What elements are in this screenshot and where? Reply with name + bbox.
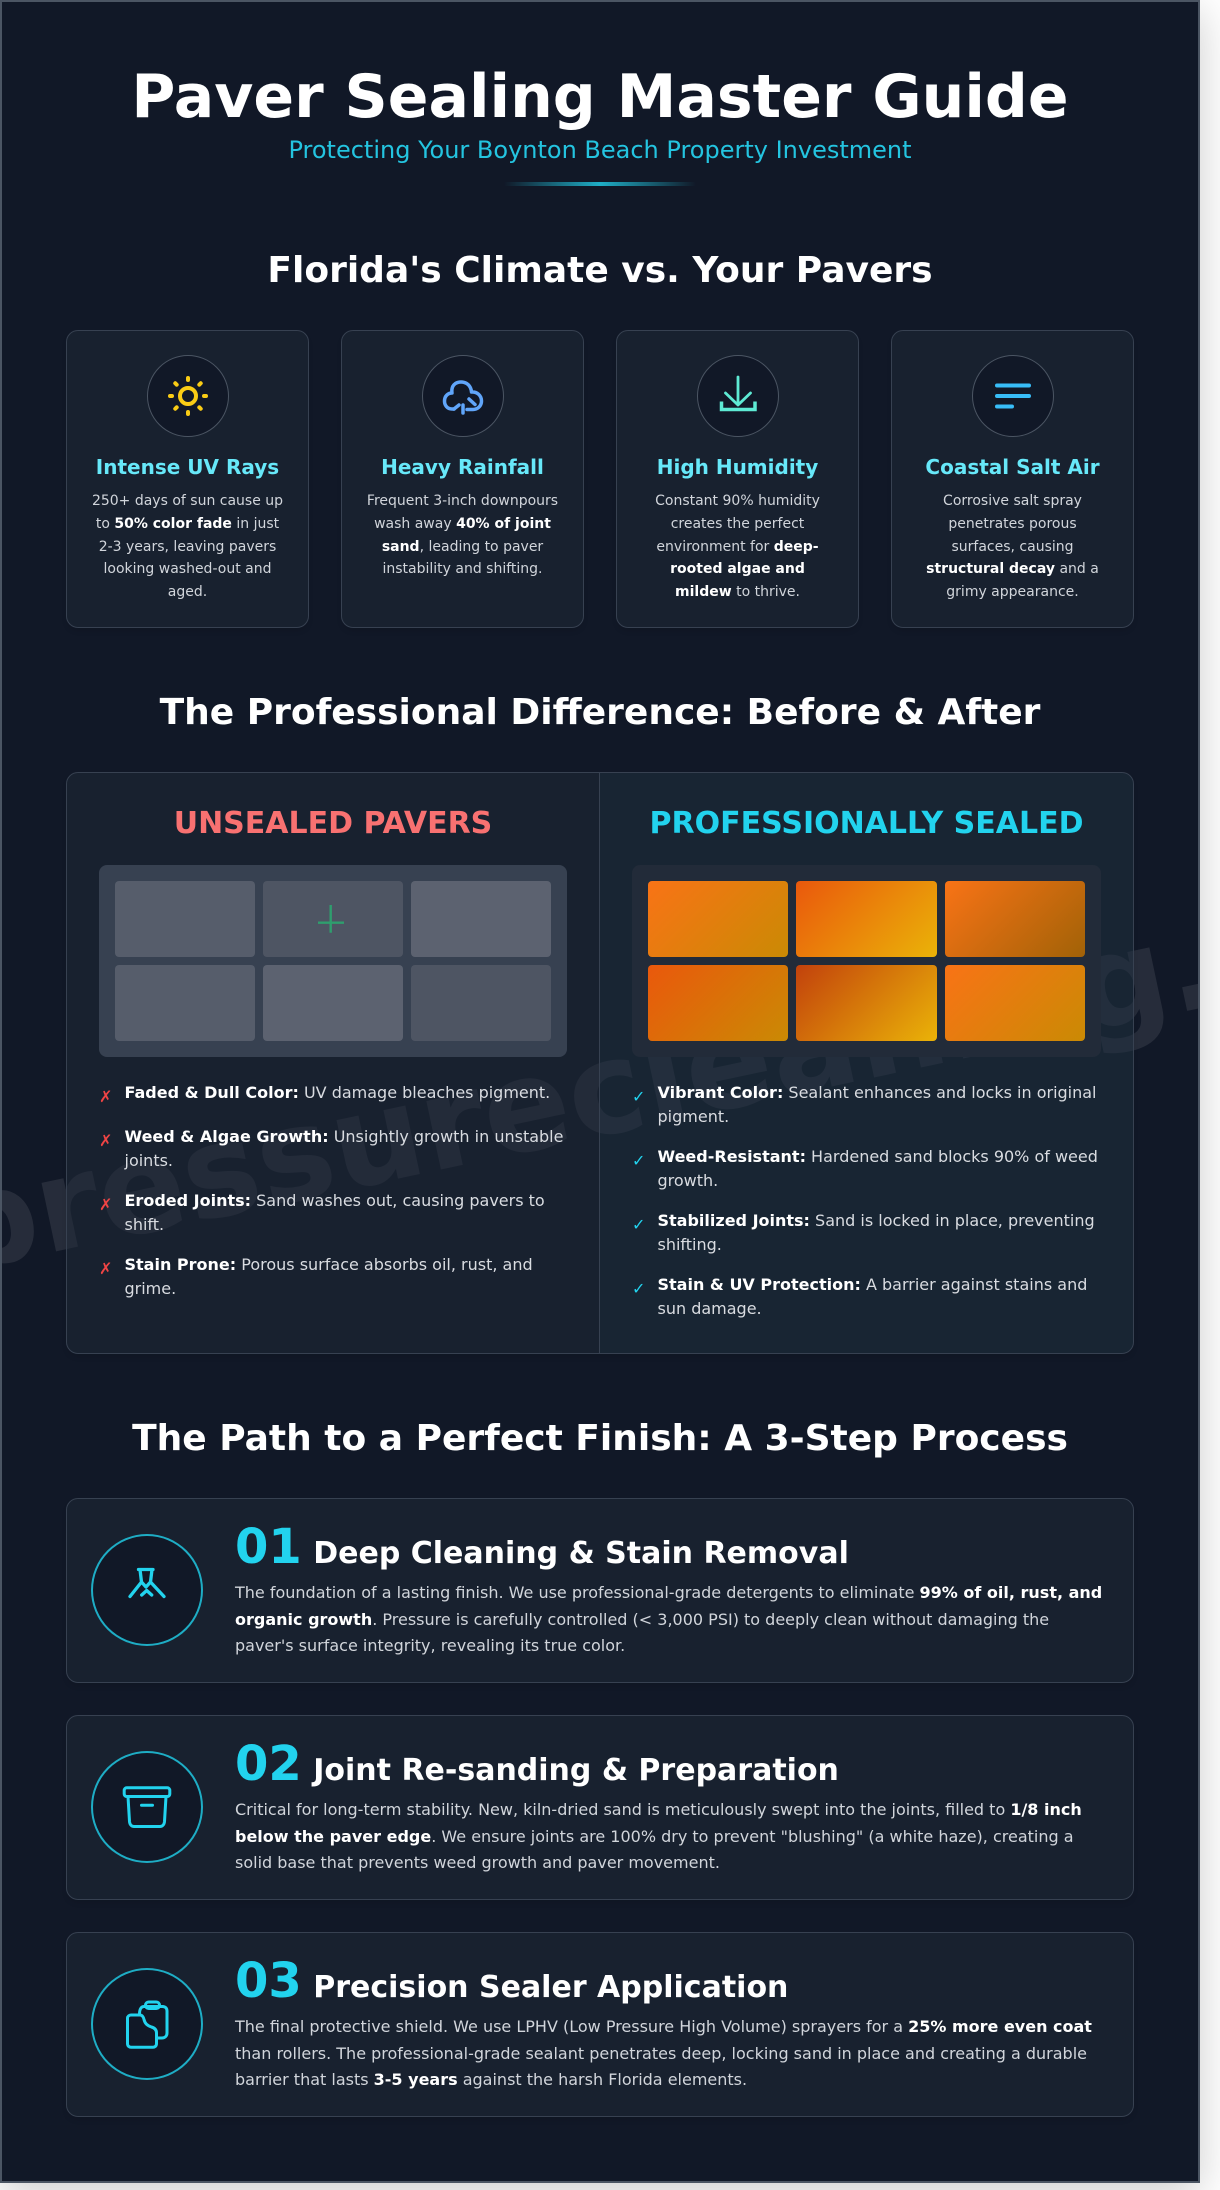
card: high humidity [616,330,859,628]
icon: salt air lines [972,355,1054,437]
step text [235,1736,1082,1872]
card: coastal salt air [891,330,1134,628]
card: intense UV rays [66,330,309,628]
step description: paver's surface integrity, revealing its true color. [235,1636,625,1655]
step description: organic growth. Pressure is carefully controlled (< 3,000 PSI) to deeply clean without damaging the [235,1610,1049,1629]
card text: creates the perfect [671,516,804,532]
panel: three step process [66,1498,1134,2117]
card text: to 50% color fade in just [96,516,279,532]
list item: ✓ [632,1151,645,1170]
section heading: process: The Path to a Perfect Finish: A 3-Step Process [132,1418,1068,1459]
illustration: faded paver grid [99,865,567,1057]
card text [92,493,283,600]
section heading: climate: Florida's Climate vs. Your Pavers [267,250,933,291]
icon: clipboard sprayer [91,1968,203,2080]
step description: than rollers. The professional-grade sealant penetrates deep, locking sand in place and creating a durable [235,2044,1087,2063]
card text: sand, leading to paver [382,538,543,554]
step description: Critical for long-term stability. New, kiln-dried sand is meticulously swept into the joints, filled to 1/8 inch [235,1800,1082,1819]
panel: before and after comparison [66,772,1134,1354]
step description: below the paver edge. We ensure joints are 100% dry to prevent "blushing" (a white haze), creating a [235,1827,1074,1846]
card title: Coastal Salt Air [925,455,1100,479]
step description: The final protective shield. We use LPHV (Low Pressure High Volume) sprayers for a 25% more even coat [235,2017,1092,2036]
card title: Intense UV Rays [96,455,279,479]
icon: sun [146,355,228,437]
card: heavy rainfall [341,330,584,628]
card text: instability and shifting. [382,561,543,577]
header [131,62,1069,186]
list item: Weed-Resistant: Hardened sand blocks 90% of weed [658,1147,1098,1166]
card text: aged. [168,584,207,600]
list item: ✓ [632,1087,645,1106]
card text: grimy appearance. [946,584,1079,600]
list item: sun damage. [658,1299,762,1318]
step description [235,1800,1082,1872]
list item: Stain & UV Protection: A barrier against stains and [658,1275,1087,1294]
list item: grime. [124,1279,176,1298]
step heading: 03 Precision Sealer Application [235,1953,788,2009]
step heading: 01 Deep Cleaning & Stain Removal [235,1519,849,1575]
list item: Vibrant Color: Sealant enhances and locks in original [658,1083,1096,1102]
card title: Heavy Rainfall [381,455,544,479]
illustration: vibrant paver grid [632,865,1101,1057]
subtitle: Protecting Your Boynton Beach Property Investment [288,136,912,164]
list item: ✗ [99,1131,112,1150]
list item: ✗ [99,1259,112,1278]
card text: environment for deep- [656,538,819,554]
list item: shifting. [658,1235,722,1254]
step 1 [66,1498,1134,1683]
icon: cleaning nozzle [91,1534,203,1646]
list item: Faded & Dull Color: UV damage bleaches pigment. [124,1083,550,1102]
list item: shift. [124,1215,164,1234]
column heading: UNSEALED PAVERS [174,806,492,841]
gradient accent bar [504,182,696,186]
list item [632,1211,1095,1254]
card text [655,493,820,600]
card text: wash away 40% of joint [374,516,551,532]
list item: ✓ [632,1279,645,1298]
card text: Frequent 3-inch downpours [367,493,558,509]
list item: pigment. [658,1107,729,1126]
list: sealed benefits [632,1083,1098,1318]
column: professionally sealed [600,773,1133,1353]
card text: mildew to thrive. [675,584,800,600]
column heading: PROFESSIONALLY SEALED [650,806,1084,841]
list item [99,1191,545,1234]
step 3 [66,1932,1134,2117]
card text: penetrates porous [948,516,1077,532]
step description [234,2017,1092,2089]
card text: looking washed-out and [104,561,271,577]
card text: 2-3 years, leaving pavers [99,538,276,554]
list item [632,1147,1098,1190]
list item: Weed & Algae Growth: Unsightly growth in unstable [124,1127,563,1146]
card text: 250+ days of sun cause up [92,493,283,509]
list item [632,1275,1087,1318]
list item: Stabilized Joints: Sand is locked in place, preventing [658,1211,1095,1230]
card text [926,493,1099,600]
card text: structural decay and a [926,561,1099,577]
section heading: before and after: The Professional Difference: Before & After [160,692,1040,733]
step 2 [66,1715,1134,1900]
step text [234,1953,1092,2089]
step description [234,1583,1102,1655]
card text: Constant 90% humidity [655,493,820,509]
list item: joints. [124,1151,173,1170]
card text: surfaces, causing [951,538,1074,554]
list item: ✗ [99,1195,112,1214]
list item [99,1255,533,1298]
list item [99,1127,563,1170]
icon: archive box [91,1751,203,1863]
list: unsealed problems [99,1083,563,1298]
list item: ✓ [632,1215,645,1234]
step description: barrier that lasts 3-5 years against the harsh Florida elements. [235,2070,747,2089]
card text: rooted algae and [670,561,805,577]
list item [632,1083,1096,1126]
step text [234,1519,1102,1655]
step description: The foundation of a lasting finish. We use professional-grade detergents to eliminate 99% of oil, rust, and [235,1583,1102,1602]
list item: Stain Prone: Porous surface absorbs oil, rust, and [124,1255,533,1274]
panel: climate threat cards [66,330,1134,628]
card title: High Humidity [657,455,818,479]
card text [367,493,558,577]
column: unsealed pavers [67,773,600,1353]
list item: Eroded Joints: Sand washes out, causing pavers to [124,1191,545,1210]
list item: ✗ [99,1087,112,1106]
step description: solid base that prevents weed growth and paver movement. [235,1853,720,1872]
card text: Corrosive salt spray [943,493,1082,509]
icon: download arrow [696,355,778,437]
step heading: 02 Joint Re-sanding & Preparation [235,1736,839,1792]
icon: rain cloud [422,355,504,437]
list item: growth. [658,1171,718,1190]
title: Paver Sealing Master Guide [131,62,1069,132]
